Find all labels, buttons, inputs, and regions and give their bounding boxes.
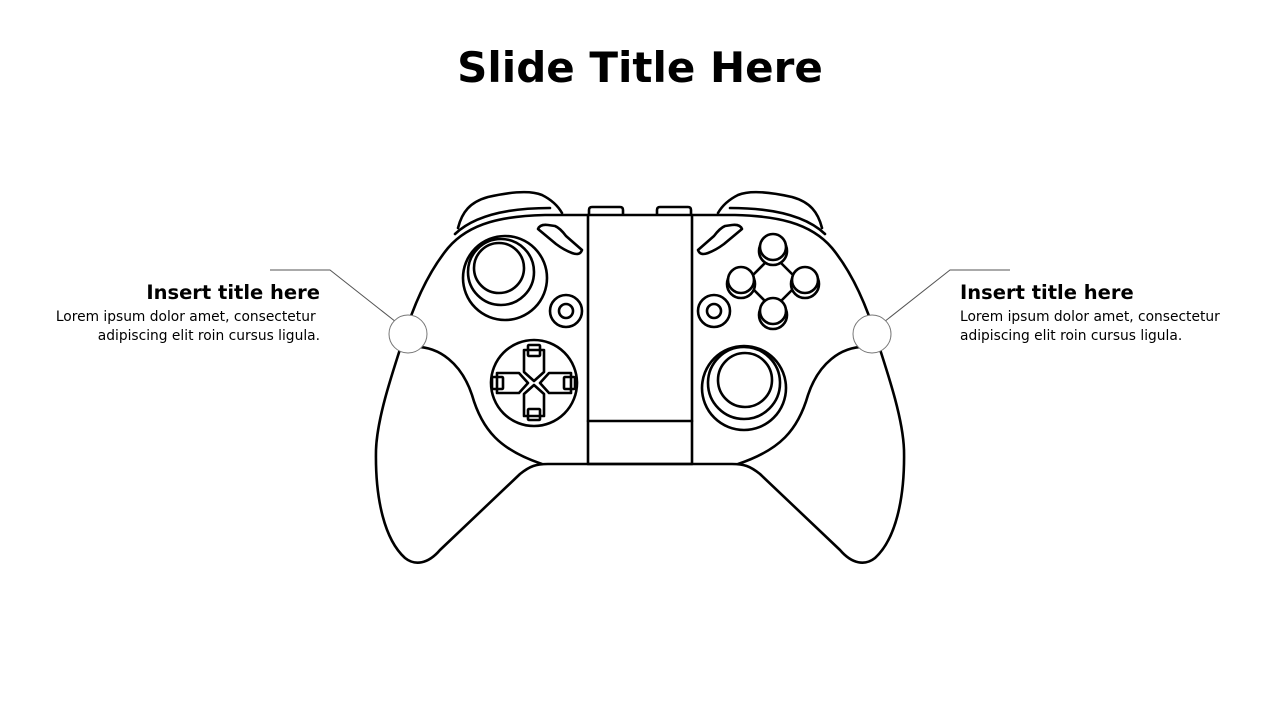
face buttons: [746, 255, 800, 309]
right text block: [960, 281, 1220, 344]
left body: Lorem ipsum dolor amet, consectetur: [56, 309, 316, 325]
callout lines: [270, 270, 1010, 322]
dpad: [491, 340, 577, 426]
right body: [960, 309, 1220, 344]
bumpers: [458, 192, 562, 228]
left body: adipiscing elit roin cursus ligula.: [98, 328, 320, 344]
left stick: [463, 236, 547, 320]
small buttons: [550, 295, 582, 327]
left heading: Insert title here: [146, 281, 320, 304]
title: Slide Title Here: [457, 43, 823, 92]
right body: adipiscing elit roin cursus ligula.: [960, 328, 1182, 344]
callout circles: [389, 315, 427, 353]
left text block: [56, 281, 320, 344]
center strip: [588, 215, 692, 464]
right body: Lorem ipsum dolor amet, consectetur: [960, 309, 1220, 325]
controller body: [376, 215, 904, 563]
slash buttons: [538, 225, 582, 254]
left body: [56, 309, 320, 344]
right stick: [702, 346, 786, 430]
right heading: Insert title here: [960, 281, 1134, 304]
